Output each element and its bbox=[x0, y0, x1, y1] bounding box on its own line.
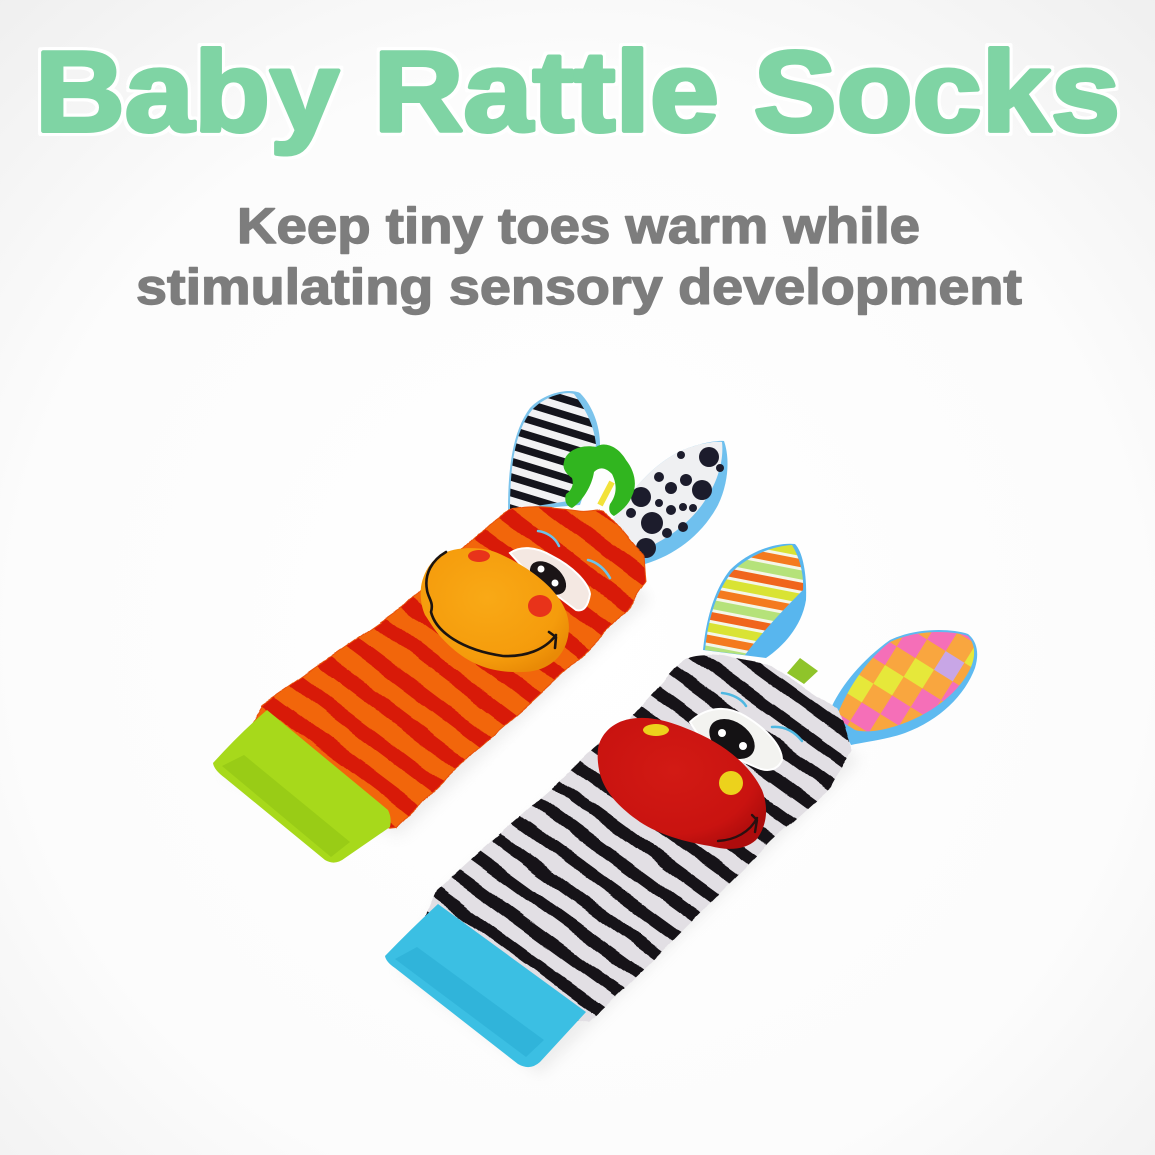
blue eyebrows bbox=[538, 531, 610, 578]
orange striped rattle sock bbox=[213, 391, 728, 863]
sock shadow bbox=[400, 650, 860, 1075]
subtitle: Keep tiny toes warm while bbox=[237, 198, 920, 254]
green tag bbox=[787, 658, 818, 684]
orange plush nose bbox=[421, 548, 569, 672]
colourful striped ear bbox=[703, 544, 806, 658]
side nostril bbox=[528, 595, 552, 617]
green cuff bbox=[213, 710, 391, 863]
checkered ear bbox=[832, 630, 977, 745]
spotted ear bbox=[612, 441, 728, 564]
orange sock body bbox=[250, 506, 646, 830]
top nostril bbox=[643, 724, 669, 736]
side nostril bbox=[719, 771, 743, 795]
embroidered eye bbox=[510, 548, 590, 610]
sock shadow bbox=[225, 540, 650, 835]
smile bbox=[718, 815, 757, 841]
embroidered eye bbox=[690, 709, 782, 770]
blue cuff bbox=[385, 904, 586, 1067]
top nostril bbox=[468, 550, 490, 562]
green teether bbox=[563, 445, 635, 516]
subtitle: stimulating sensory development bbox=[136, 259, 1022, 315]
subtitle bbox=[136, 198, 1022, 315]
red plush nose bbox=[598, 718, 766, 849]
title: Baby Rattle Socks bbox=[35, 29, 1120, 156]
zebra sock body bbox=[425, 654, 852, 1022]
black and white ear bbox=[508, 391, 600, 511]
blue eyebrows bbox=[722, 693, 802, 741]
smile bbox=[426, 552, 556, 656]
zebra striped rattle sock bbox=[385, 544, 977, 1075]
